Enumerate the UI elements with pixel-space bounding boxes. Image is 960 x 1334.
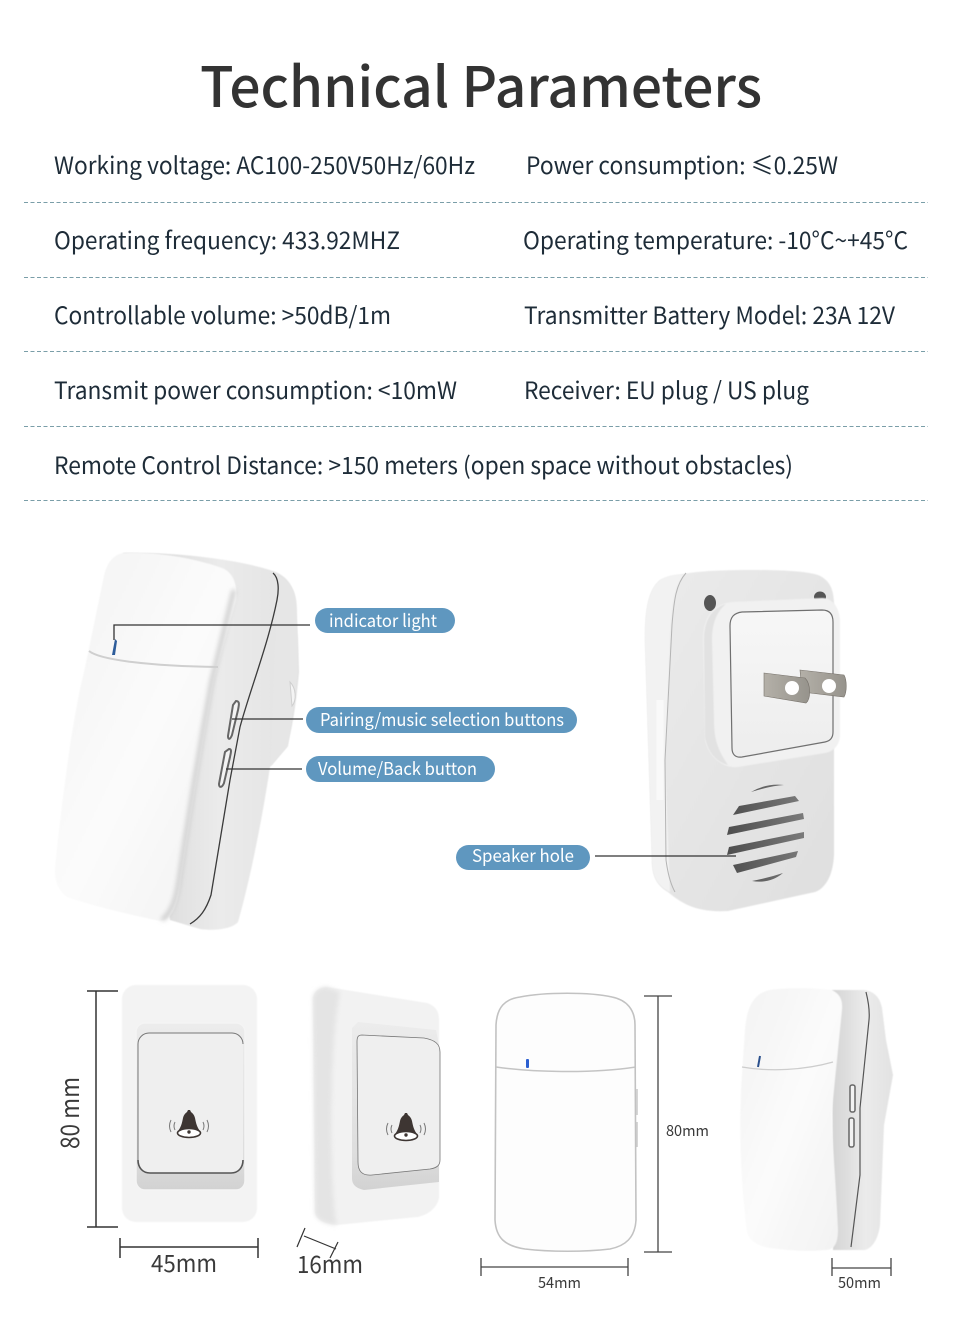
dimension: 50mm depth: 50mm	[838, 1272, 881, 1293]
dimension: 16mm depth	[297, 1228, 363, 1280]
plug base	[703, 598, 840, 767]
transmitter front view	[122, 985, 257, 1222]
transmitter angled view	[313, 987, 440, 1225]
dimension: 54mm width	[481, 1258, 628, 1293]
callout: volume button: Volume/Back button	[318, 756, 477, 781]
plug plate	[730, 610, 833, 757]
dimension: 80 mm height: 80 mm	[51, 1077, 87, 1149]
receiver small side view	[740, 988, 893, 1251]
pairing button	[228, 701, 239, 739]
callout: speaker hole	[456, 843, 736, 870]
parameter: transmit power: Transmit power consumption: <10mW	[54, 371, 457, 406]
icon: indicator LED	[112, 639, 117, 655]
callout: pairing button: Pairing/music selection buttons	[320, 707, 564, 732]
mounting holes	[704, 595, 716, 611]
parameter: receiver plug: Receiver: EU plug / US plug	[524, 371, 809, 406]
parameter: transmitter battery: Transmitter Battery Model: 23A 12V	[524, 296, 895, 331]
callout: speaker hole: Speaker hole	[472, 843, 574, 868]
callout: indicator light: indicator light	[329, 608, 437, 633]
dimension: 45mm width: 45mm	[151, 1244, 217, 1279]
icon: bell	[170, 1110, 208, 1138]
receiver back view	[645, 570, 846, 911]
parameter: remote distance: Remote Control Distance: >150 meters (open space without obstacles)	[54, 446, 793, 481]
volume button	[219, 749, 231, 787]
dimension: 54mm width: 54mm	[538, 1272, 581, 1293]
callout: volume button	[226, 756, 495, 782]
parameter: working voltage: Working voltage: AC100-250V50Hz/60Hz	[54, 146, 475, 181]
receiver front view	[495, 993, 637, 1251]
dimension: receiver 80mm height: 80mm	[666, 1120, 709, 1141]
speaker grille	[727, 785, 804, 882]
callout: indicator light	[114, 608, 455, 640]
dimension: 16mm depth: 16mm	[297, 1245, 363, 1280]
icon: bell	[386, 1113, 426, 1140]
receiver side view	[55, 553, 299, 930]
title: Technical Parameters	[200, 43, 762, 123]
dimension: receiver 80mm height	[644, 996, 709, 1252]
plug pins	[800, 670, 846, 697]
icon: LED	[526, 1059, 529, 1068]
dimension: 45mm width	[120, 1238, 258, 1279]
parameter: operating frequency: Operating frequency: 433.92MHZ	[54, 221, 400, 256]
dimension: 50mm depth	[832, 1258, 891, 1293]
parameter: power consumption: Power consumption: ≤0.25W	[526, 146, 838, 181]
dimension: 80 mm height	[51, 991, 118, 1227]
parameter: controllable volume: Controllable volume: >50dB/1m	[54, 296, 391, 331]
parameter table	[24, 146, 928, 500]
parameter: operating temperature: Operating temperature: -10°C~+45°C	[523, 221, 908, 256]
icon: LED	[758, 1056, 760, 1067]
